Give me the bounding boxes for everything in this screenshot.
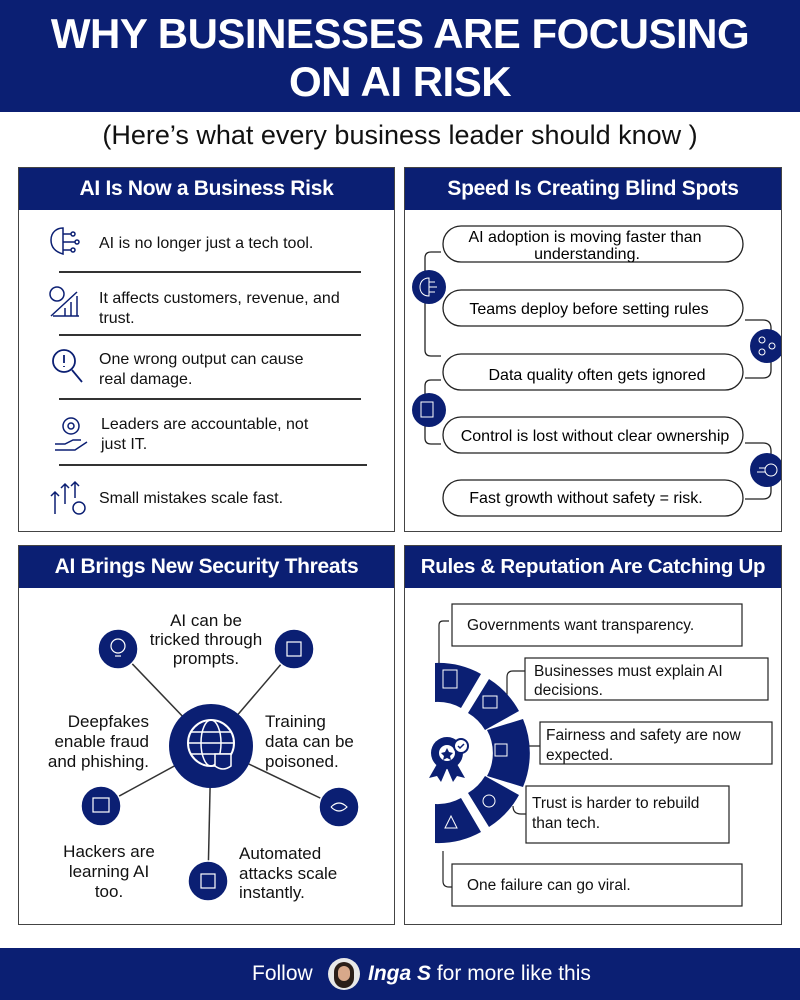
icon: avatar bbox=[328, 958, 360, 990]
arc diagram: expected. bbox=[546, 747, 613, 764]
hub diagram: Training bbox=[265, 712, 326, 731]
arc diagram: Fairness and safety are now bbox=[546, 727, 742, 744]
node icons bbox=[81, 629, 359, 901]
heading: Rules & Reputation Are Catching Up bbox=[421, 555, 765, 578]
footer: Inga S for more like this bbox=[368, 962, 591, 985]
item list: One wrong output can cause bbox=[99, 351, 304, 368]
icon: hand with gear bbox=[55, 417, 88, 451]
arc diagram: One failure can go viral. bbox=[467, 877, 631, 894]
heading bbox=[405, 168, 781, 210]
hub diagram: too. bbox=[95, 882, 123, 901]
title banner: WHY BUSINESSES ARE FOCUSING bbox=[51, 10, 749, 57]
item list bbox=[49, 227, 367, 515]
item list: It affects customers, revenue, and bbox=[99, 290, 340, 307]
step 4: Control is lost without clear ownership bbox=[461, 428, 729, 445]
arc diagram: Businesses must explain AI bbox=[534, 663, 723, 680]
hub diagram: prompts. bbox=[173, 649, 239, 668]
badge icon bbox=[429, 737, 468, 782]
flow chart bbox=[412, 225, 781, 517]
boxes: Governments want transparency. bbox=[467, 617, 694, 634]
hub diagram: data can be bbox=[265, 732, 354, 751]
panel: AI Brings New Security Threats bbox=[18, 545, 395, 925]
footer bbox=[0, 948, 800, 1000]
hub diagram: and phishing. bbox=[48, 752, 149, 771]
heading bbox=[19, 546, 394, 588]
step 4 bbox=[443, 417, 743, 453]
item list: real damage. bbox=[99, 371, 192, 388]
hub diagram: enable fraud bbox=[54, 732, 149, 751]
step 2 bbox=[443, 290, 743, 326]
icon: revenue chart bbox=[49, 286, 79, 317]
item list: Small mistakes scale fast. bbox=[99, 490, 283, 507]
labels: AI can be bbox=[170, 611, 242, 630]
panel: AI Is Now a Business Risk bbox=[18, 167, 395, 532]
heading: AI Is Now a Business Risk bbox=[80, 177, 333, 200]
step 5: Fast growth without safety = risk. bbox=[469, 490, 703, 507]
hub diagram bbox=[48, 611, 358, 902]
heading bbox=[405, 546, 781, 588]
item list: just IT. bbox=[101, 436, 147, 453]
hub diagram: learning AI bbox=[69, 862, 149, 881]
step 3: Data quality often gets ignored bbox=[488, 367, 706, 384]
subtitle: (Here’s what every business leader should know ) bbox=[102, 120, 698, 150]
step 1: understanding. bbox=[534, 246, 640, 263]
boxes bbox=[452, 604, 742, 646]
central globe bbox=[169, 704, 253, 788]
title banner bbox=[0, 0, 800, 112]
step 1 bbox=[443, 226, 743, 263]
footer: Follow bbox=[252, 962, 313, 985]
arc diagram: than tech. bbox=[532, 815, 600, 832]
arc diagram bbox=[429, 603, 773, 907]
step 3 bbox=[443, 354, 743, 390]
step 2: Teams deploy before setting rules bbox=[469, 301, 709, 318]
panel: Rules & Reputation Are Catching Up bbox=[404, 545, 782, 925]
panel: Speed Is Creating Blind Spots bbox=[404, 167, 782, 532]
arc diagram: Trust is harder to rebuild bbox=[532, 795, 699, 812]
hub diagram: tricked through bbox=[150, 630, 262, 649]
hub diagram: instantly. bbox=[239, 883, 305, 902]
item list: Leaders are accountable, not bbox=[101, 416, 308, 433]
hub diagram: Deepfakes bbox=[68, 712, 149, 731]
hub diagram: Hackers are bbox=[63, 842, 155, 861]
icon circles bbox=[412, 270, 784, 487]
item list: trust. bbox=[99, 310, 135, 327]
heading: Speed Is Creating Blind Spots bbox=[447, 177, 739, 200]
step 5 bbox=[443, 480, 743, 516]
arc diagram: decisions. bbox=[534, 682, 603, 699]
hub diagram: Automated bbox=[239, 844, 321, 863]
title banner: ON AI RISK bbox=[289, 58, 511, 105]
item list: AI is no longer just a tech tool. bbox=[99, 235, 313, 252]
arc segments bbox=[435, 663, 530, 843]
hub diagram: attacks scale bbox=[239, 864, 337, 883]
icon: scaling arrows bbox=[50, 481, 86, 515]
icon: brain bbox=[50, 227, 80, 255]
hub diagram: poisoned. bbox=[265, 752, 339, 771]
icon: magnifier alert bbox=[52, 349, 83, 383]
heading: AI Brings New Security Threats bbox=[55, 555, 358, 578]
heading bbox=[19, 168, 394, 210]
step 1: AI adoption is moving faster than bbox=[468, 229, 702, 246]
